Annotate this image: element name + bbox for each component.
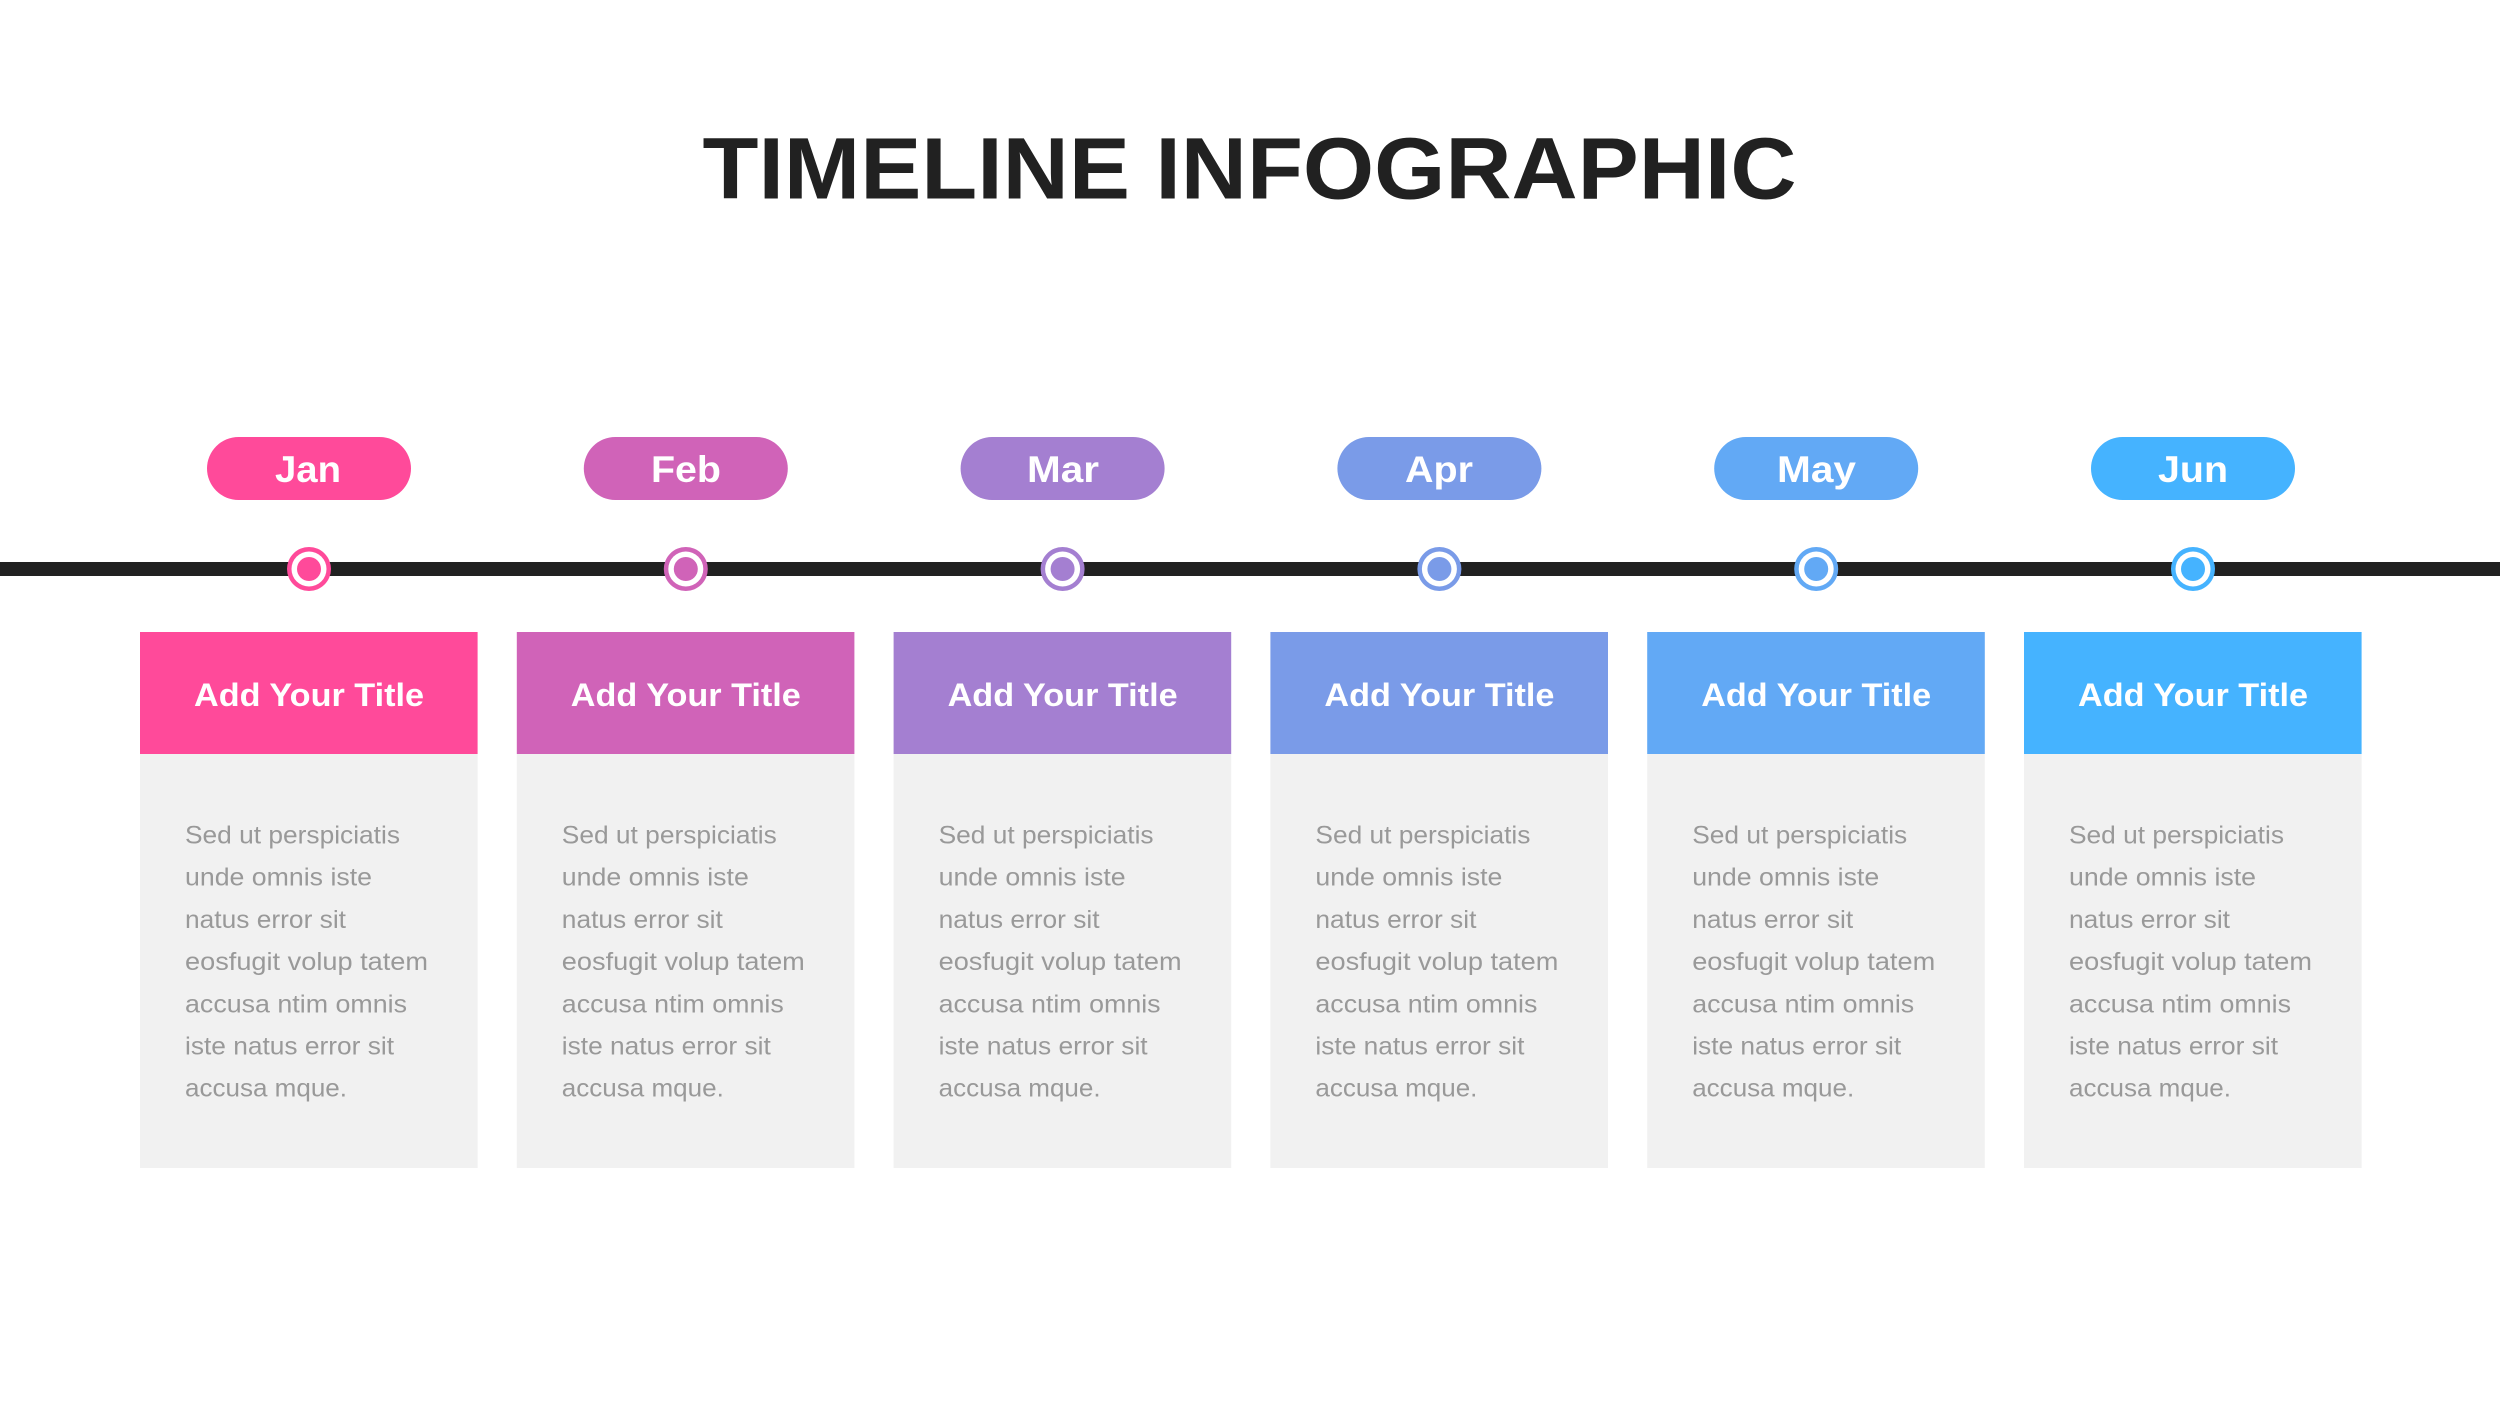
month pill: May: May: [1777, 449, 1856, 490]
text panel: May: accusa mque.: [1692, 1075, 1854, 1103]
month pill: Apr: [1337, 437, 1541, 500]
text panel: Apr: unde omnis iste: [1315, 864, 1502, 892]
text panel: Mar: accusa mque.: [939, 1075, 1101, 1103]
title bar: Apr: [1270, 632, 1608, 754]
column: March: [894, 437, 1231, 1168]
text panel: Apr: eosfugit volup tatem: [1315, 948, 1558, 976]
month pill: Feb: [584, 437, 788, 500]
text panel: Feb: Sed ut perspiciatis: [562, 822, 777, 850]
timeline marker: Jan: [287, 547, 331, 591]
text panel: Mar: unde omnis iste: [939, 864, 1126, 892]
text panel: Apr: natus error sit: [1315, 906, 1476, 934]
month pill: May: [1714, 437, 1918, 500]
title bar: Jan: Add Your Title: [194, 677, 424, 713]
text panel: May: accusa ntim omnis: [1692, 990, 1914, 1018]
text panel: Jan: Sed ut perspiciatis: [185, 822, 400, 850]
column: April: [1270, 437, 1608, 1168]
text panel: Apr: Sed ut perspiciatis: [1315, 822, 1530, 850]
column: May: [1647, 437, 1985, 1168]
timeline line: [0, 562, 2500, 576]
text panel: Apr: accusa ntim omnis: [1315, 990, 1537, 1018]
text panel: Feb: eosfugit volup tatem: [562, 948, 805, 976]
timeline marker: May: [1794, 547, 1838, 591]
text panel: Jan: unde omnis iste: [185, 864, 372, 892]
text panel: May: natus error sit: [1692, 906, 1853, 934]
timeline marker: Jun: [2171, 547, 2215, 591]
title bar: Mar: Add Your Title: [948, 677, 1178, 713]
title bar: Jan: [140, 632, 478, 754]
text panel: Apr: [1270, 754, 1608, 1168]
text panel: May: [1647, 754, 1985, 1168]
month pill: Jan: [207, 437, 411, 500]
text panel: Jan: eosfugit volup tatem: [185, 948, 428, 976]
text panel: Mar: eosfugit volup tatem: [939, 948, 1182, 976]
month pill: Jun: [2091, 437, 2295, 500]
month pill: Mar: [961, 437, 1165, 500]
month pill: Jan: Jan: [275, 449, 341, 490]
text panel: May: eosfugit volup tatem: [1692, 948, 1935, 976]
column: February: [517, 437, 854, 1168]
text panel: Apr: accusa mque.: [1315, 1075, 1477, 1103]
column: June: [2024, 437, 2362, 1168]
title bar: May: Add Your Title: [1701, 677, 1931, 713]
text panel: Jun: natus error sit: [2069, 906, 2230, 934]
month pill: Feb: Feb: [651, 449, 721, 490]
text panel: Feb: accusa mque.: [562, 1075, 724, 1103]
text panel: Mar: natus error sit: [939, 906, 1100, 934]
text panel: Feb: accusa ntim omnis: [562, 990, 784, 1018]
text panel: Jun: unde omnis iste: [2069, 864, 2256, 892]
text panel: Feb: natus error sit: [562, 906, 723, 934]
title bar: May: [1647, 632, 1985, 754]
title bar: Feb: Add Your Title: [571, 677, 801, 713]
text panel: Jun: Sed ut perspiciatis: [2069, 822, 2284, 850]
timeline marker: Apr: [1417, 547, 1461, 591]
text panel: Jan: iste natus error sit: [185, 1032, 394, 1060]
timeline marker: Mar: [1041, 547, 1085, 591]
text panel: Jan: accusa ntim omnis: [185, 990, 407, 1018]
month pill: Mar: Mar: [1027, 449, 1099, 490]
title: TIMELINE INFOGRAPHIC: [702, 120, 1796, 218]
title bar: Apr: Add Your Title: [1324, 677, 1554, 713]
text panel: May: unde omnis iste: [1692, 864, 1879, 892]
month pill: Apr: Apr: [1405, 449, 1473, 490]
title bar: Mar: [894, 632, 1231, 754]
text panel: Feb: iste natus error sit: [562, 1032, 771, 1060]
text panel: Mar: iste natus error sit: [939, 1032, 1148, 1060]
text panel: Mar: [894, 754, 1231, 1168]
text panel: Feb: [517, 754, 854, 1168]
text panel: May: Sed ut perspiciatis: [1692, 822, 1907, 850]
title bar: Jun: Add Your Title: [2078, 677, 2308, 713]
month pill: Jun: Jun: [2158, 449, 2228, 490]
text panel: Mar: Sed ut perspiciatis: [939, 822, 1154, 850]
text panel: May: iste natus error sit: [1692, 1032, 1901, 1060]
text panel: Jun: iste natus error sit: [2069, 1032, 2278, 1060]
text panel: Apr: iste natus error sit: [1315, 1032, 1524, 1060]
timeline marker: Feb: [664, 547, 708, 591]
title bar: Jun: [2024, 632, 2362, 754]
text panel: Jan: natus error sit: [185, 906, 346, 934]
text panel: Mar: accusa ntim omnis: [939, 990, 1161, 1018]
title bar: Feb: [517, 632, 854, 754]
text panel: Jan: accusa mque.: [185, 1075, 347, 1103]
column: January: [140, 437, 478, 1168]
text panel: Jun: accusa ntim omnis: [2069, 990, 2291, 1018]
text panel: Jun: eosfugit volup tatem: [2069, 948, 2312, 976]
text panel: Jun: [2024, 754, 2362, 1168]
text panel: Feb: unde omnis iste: [562, 864, 749, 892]
text panel: Jan: [140, 754, 478, 1168]
text panel: Jun: accusa mque.: [2069, 1075, 2231, 1103]
